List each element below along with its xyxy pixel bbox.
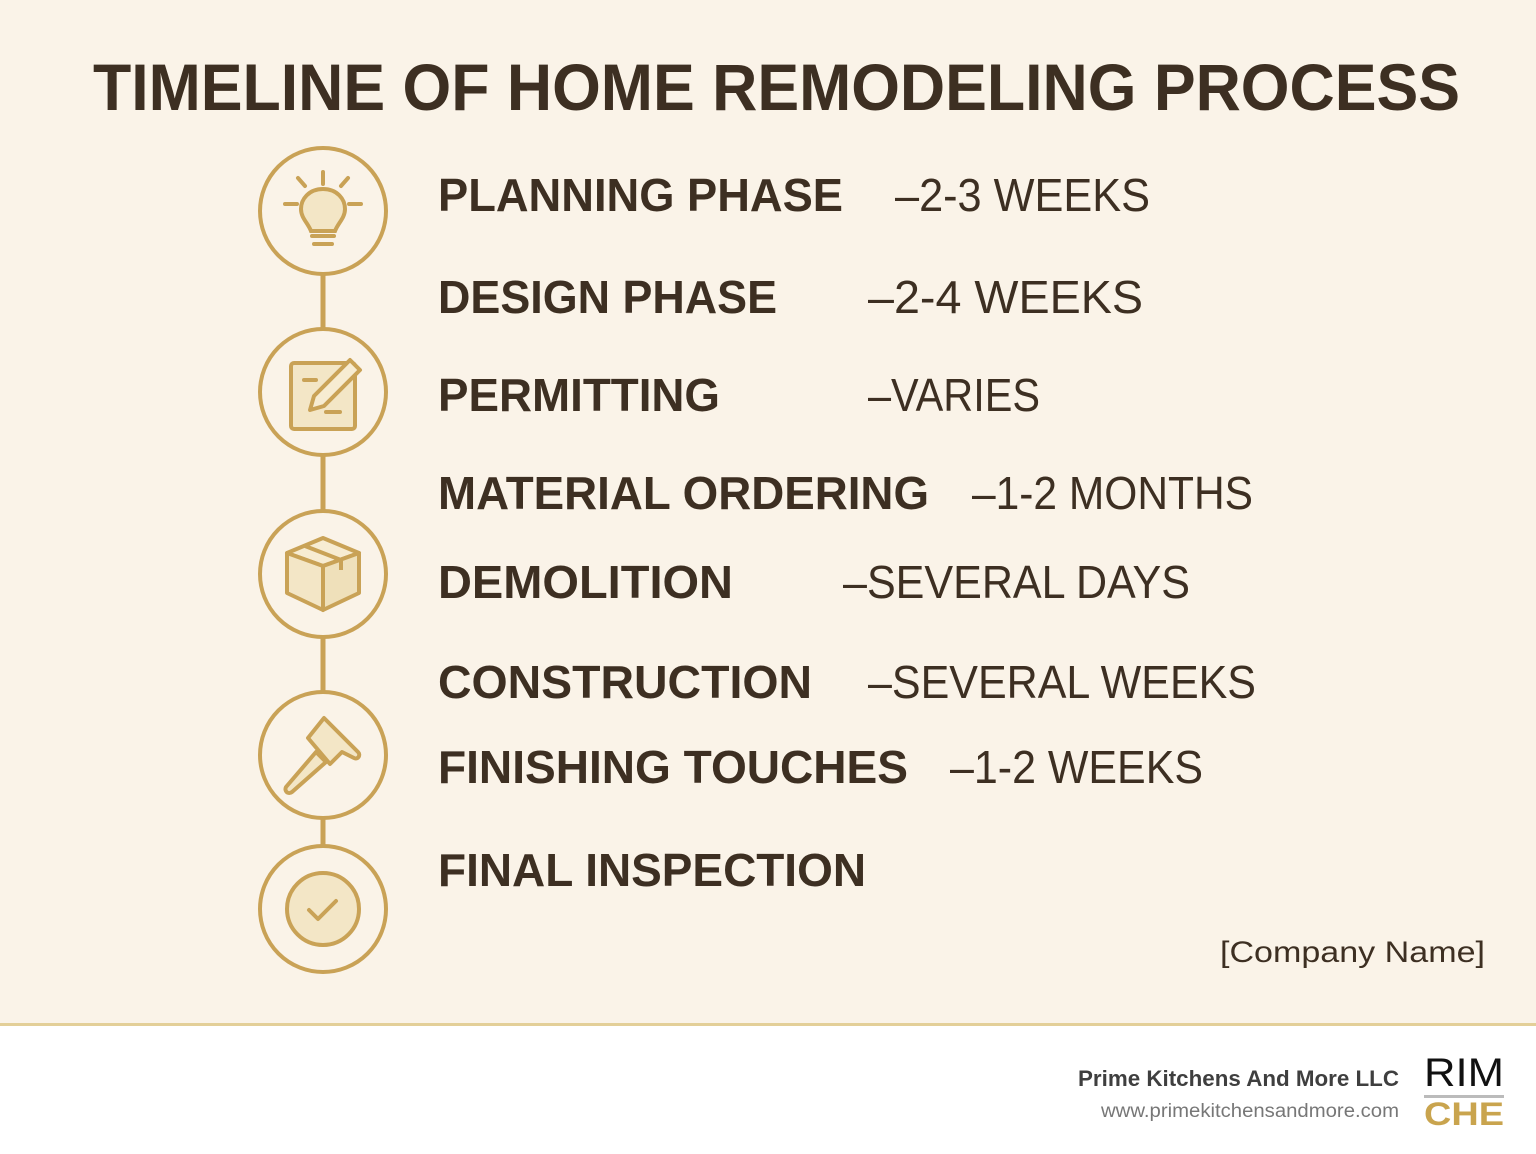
durations: –SEVERAL DAYS: [843, 556, 1190, 608]
logo: [1424, 1051, 1504, 1132]
phase labels: DEMOLITION: [438, 556, 733, 608]
phase labels: FINAL INSPECTION: [438, 844, 866, 896]
icon: hammer: [260, 692, 386, 818]
logo: CHE: [1424, 1096, 1504, 1132]
timeline connectors: [320, 275, 326, 845]
company name placeholder: [Company Name]: [1220, 936, 1485, 969]
phase labels: PLANNING PHASE: [438, 169, 843, 221]
phase labels: FINISHING TOUCHES: [438, 741, 908, 793]
footer: [0, 1023, 1536, 1154]
icon: box: [260, 511, 386, 637]
phase labels: CONSTRUCTION: [438, 656, 812, 708]
durations: –VARIES: [868, 369, 1040, 421]
icon: check: [260, 846, 386, 972]
phase labels: [438, 169, 929, 896]
phase labels: DESIGN PHASE: [438, 271, 777, 323]
durations: –2-4 WEEKS: [868, 271, 1143, 323]
title: TIMELINE OF HOME REMODELING PROCESS: [93, 50, 1460, 124]
durations: –1-2 MONTHS: [972, 467, 1253, 519]
footer: Prime Kitchens And More LLC: [1078, 1066, 1399, 1091]
phase labels: PERMITTING: [438, 369, 720, 421]
phase labels: MATERIAL ORDERING: [438, 467, 929, 519]
logo: RIM: [1424, 1051, 1504, 1095]
durations: –SEVERAL WEEKS: [868, 656, 1256, 708]
durations: [843, 169, 1256, 793]
footer: www.primekitchensandmore.com: [1100, 1101, 1399, 1122]
icon: document with pencil: [260, 329, 386, 455]
durations: –2-3 WEEKS: [895, 169, 1150, 221]
durations: –1-2 WEEKS: [950, 741, 1203, 793]
icon: light bulb: [260, 148, 386, 274]
